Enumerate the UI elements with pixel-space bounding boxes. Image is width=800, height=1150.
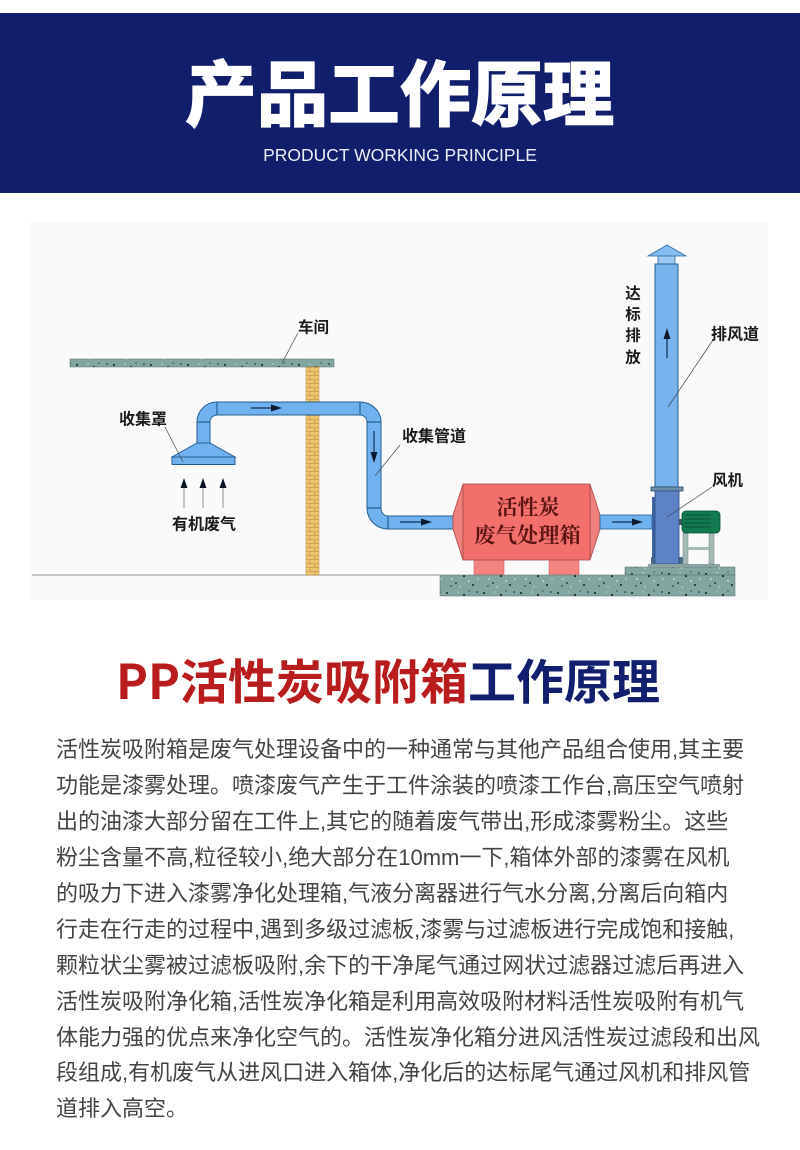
label: collection duct: 收集管道	[402, 426, 466, 446]
diagram background	[30, 222, 768, 600]
arrow: duct to fan	[612, 518, 643, 526]
body text: 粉尘含量不高,粒径较小,绝大部分在10mm一下,箱体外部的漆雾在风机	[56, 845, 729, 870]
section heading: PP活性炭吸附箱工作原理	[116, 643, 660, 713]
title: 产品工作原理	[185, 39, 614, 141]
label: exhaust duct: 排风道	[711, 324, 759, 344]
collection hood	[172, 443, 235, 464]
process diagram	[32, 244, 759, 596]
body text: 活性炭吸附净化箱,活性炭净化箱是利用高效吸附材料活性炭吸附有机气	[56, 989, 744, 1014]
box label line 1: 活性炭	[496, 496, 560, 520]
body text: 活性炭吸附箱是废气处理设备中的一种通常与其他产品组合使用,其主要	[56, 737, 744, 762]
box label line 2: 废气处理箱	[474, 524, 581, 548]
exhaust stack	[648, 245, 686, 487]
arrow: duct top	[251, 404, 282, 412]
label: organic waste gas: 有机废气	[172, 514, 236, 534]
concrete base	[440, 567, 735, 596]
fan	[648, 487, 720, 567]
arrow: stack up	[664, 328, 670, 358]
label: fan: 风机	[712, 472, 744, 490]
body text: 行走在行走的过程中,遇到多级过滤板,漆雾与过滤板进行完成饱和接触,	[56, 917, 734, 942]
subtitle: PRODUCT WORKING PRINCIPLE	[263, 145, 537, 165]
arrows: organic waste gas rising	[180, 478, 226, 508]
body text: 的吸力下进入漆雾净化处理箱,气液分离器进行气水分离,分离后向箱内	[56, 881, 728, 906]
label: workshop: 车间	[298, 318, 329, 336]
header banner	[0, 13, 800, 193]
label: compliant discharge: 放	[625, 348, 641, 366]
label: compliant discharge: 排	[625, 326, 641, 344]
label: compliant discharge: 标	[625, 306, 641, 324]
collection duct	[197, 402, 453, 529]
body text: 颗粒状尘雾被过滤板吸附,余下的干净尾气通过网状过滤器过滤后再进入	[56, 953, 744, 978]
body text: 功能是漆雾处理。喷漆废气产生于工件涂装的喷漆工作台,高压空气喷射	[56, 773, 744, 798]
label: compliant discharge: 达	[625, 284, 641, 302]
body text: 段组成,有机废气从进风口进入箱体,净化后的达标尾气通过风机和排风管	[56, 1060, 750, 1085]
ground line	[32, 574, 440, 576]
leader lines	[165, 333, 713, 517]
arrow: duct into box	[400, 518, 432, 526]
label: compliant discharge	[625, 284, 641, 366]
ceiling slab	[70, 359, 334, 367]
brick column	[306, 367, 319, 575]
body text: 体能力强的优点来净化空气的。活性炭净化箱分进风活性炭过滤段和出风	[56, 1024, 760, 1050]
body text: 道排入高空。	[56, 1096, 188, 1121]
motor and stand	[679, 511, 720, 564]
body text	[56, 737, 760, 1121]
label: hood: 收集罩	[119, 410, 167, 428]
activated carbon box	[453, 484, 600, 575]
arrow: duct down	[370, 431, 378, 463]
body text: 出的油漆大部分留在工件上,其它的随着废气带出,形成漆雾粉尘。这些	[56, 809, 728, 834]
outlet duct	[600, 515, 652, 529]
